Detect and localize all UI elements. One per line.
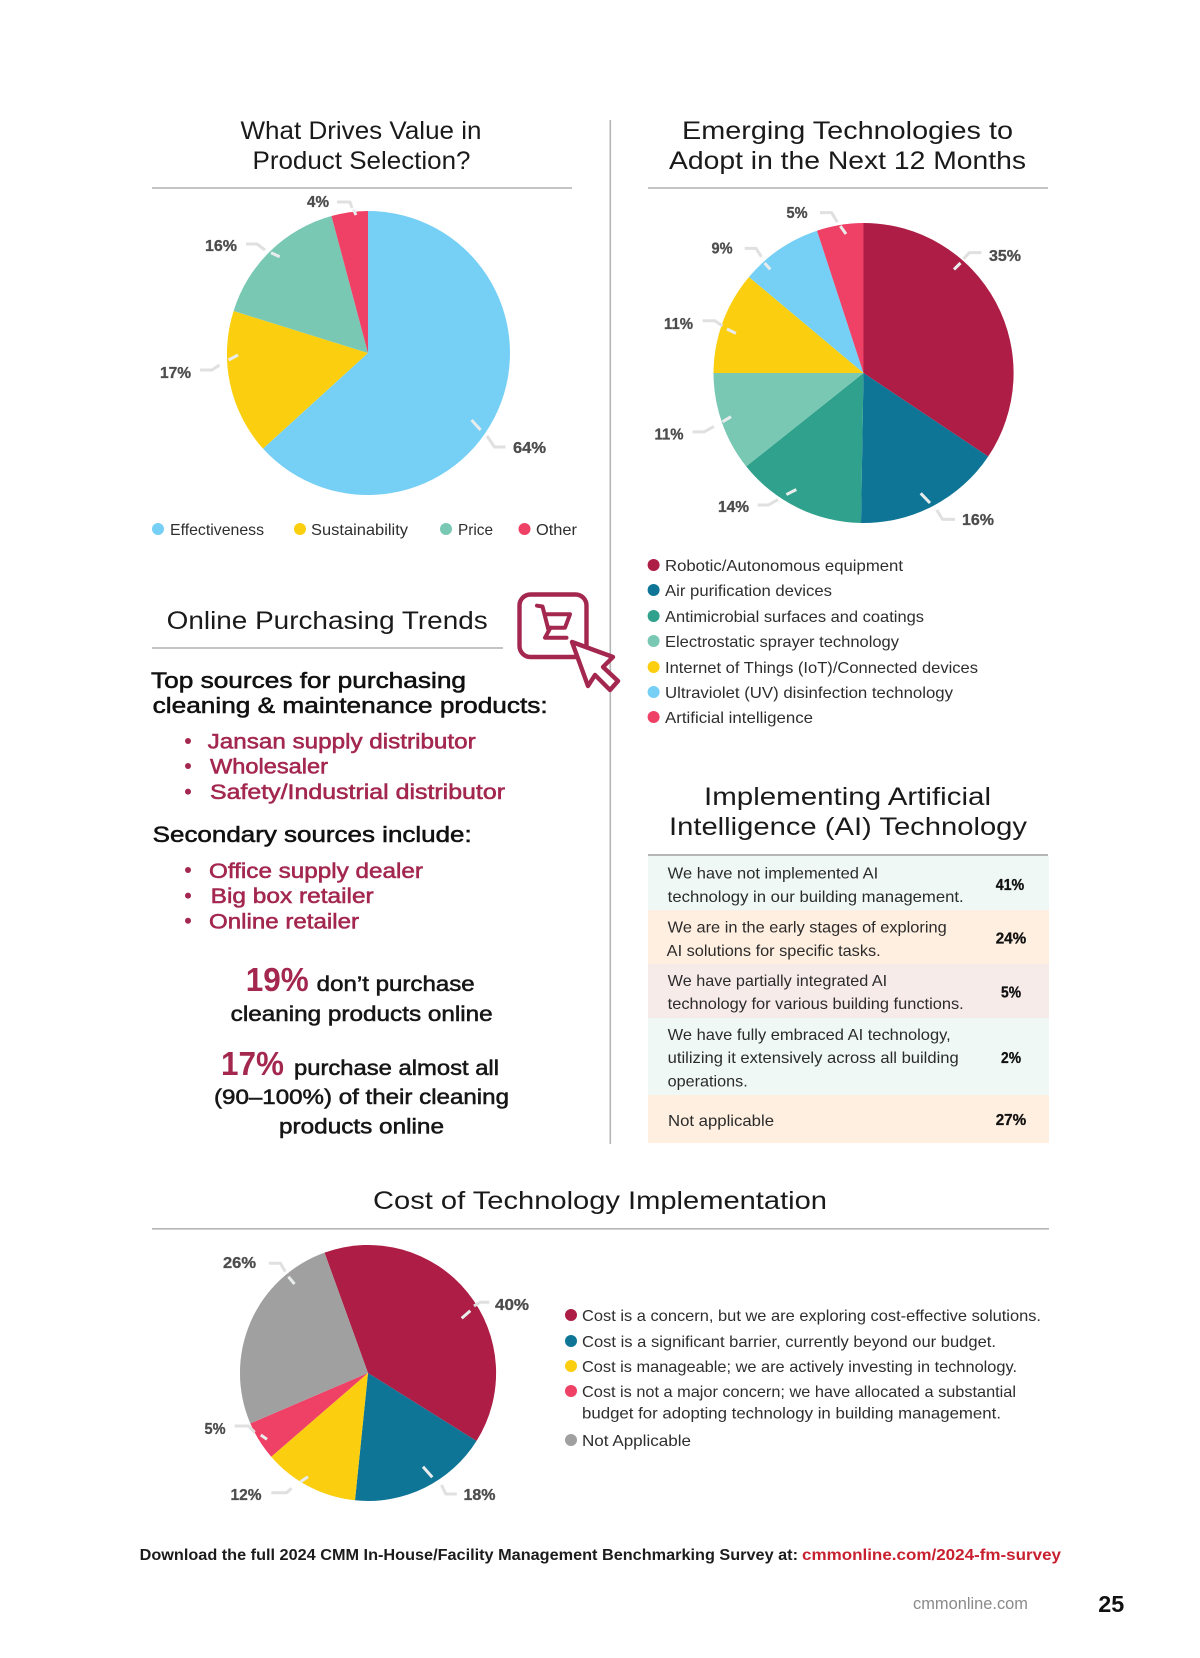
pie chart: emerging technologies: 11% — [654, 426, 684, 444]
legend: emerging technologies: Electrostatic sprayer technology — [665, 634, 899, 651]
table row: early stages: We are in the early stages of exploring — [668, 920, 947, 936]
legend: emerging technologies: Internet of Things (IoT)/Connected devices — [665, 660, 978, 677]
pie chart: emerging technologies — [654, 205, 1021, 529]
panel: cost of technology implementation — [152, 1187, 1049, 1504]
table row: not implemented: 41% — [996, 877, 1024, 894]
panel: emerging technologies — [648, 117, 1048, 727]
legend: emerging technologies — [648, 558, 978, 727]
pie chart: emerging technologies: 9% — [712, 240, 732, 258]
table row: not applicable — [648, 1095, 1049, 1143]
table row: fully embraced: We have fully embraced AI technology, — [668, 1027, 951, 1044]
callout: 19 percent: 19% — [246, 961, 309, 998]
heading: implementing AI: Implementing Artificial — [704, 783, 991, 811]
text block: secondary sources: Secondary sources include: — [153, 822, 472, 847]
table row: fully embraced: utilizing it extensively across all building — [668, 1050, 959, 1067]
heading: implementing AI: Intelligence (AI) Technology — [669, 813, 1028, 841]
heading: what drives value: What Drives Value in — [240, 117, 482, 145]
footer: website: cmmonline.com — [913, 1595, 1028, 1613]
list: secondary sources: Big box retailer — [211, 885, 374, 908]
legend: emerging technologies: Ultraviolet (UV) disinfection technology — [665, 685, 953, 702]
legend: value drivers: Sustainability — [311, 522, 408, 539]
pie chart: emerging technologies: 16% — [962, 512, 994, 529]
table row: early stages: 24% — [996, 930, 1026, 948]
pie chart: cost of technology: 26% — [223, 1255, 256, 1272]
callout: 19 percent — [231, 961, 493, 1026]
legend: value drivers: Other — [536, 522, 578, 539]
list: secondary sources — [185, 860, 423, 934]
pie chart: value drivers: 16% — [205, 238, 237, 255]
table row: not implemented: technology in our building management. — [668, 889, 964, 906]
pie chart: cost of technology: 18% — [464, 1487, 496, 1504]
list: secondary sources: Office supply dealer — [209, 860, 423, 883]
legend: cost of technology: Cost is a concern, but we are exploring cost-effective solutions. — [582, 1308, 1041, 1325]
heading: emerging technologies: Emerging Technologies to — [682, 117, 1013, 145]
legend: cost of technology: Not Applicable — [582, 1433, 691, 1450]
pie chart: emerging technologies: 5% — [786, 205, 808, 222]
table row: not implemented: We have not implemented AI — [668, 866, 878, 882]
list: top sources: Wholesaler — [210, 756, 328, 778]
pie chart: cost of technology: 12% — [230, 1487, 262, 1504]
pie chart: value drivers: 4% — [307, 194, 329, 211]
legend: value drivers: Price — [458, 522, 493, 539]
table row: partially integrated: 5% — [1001, 984, 1021, 1002]
pie chart: value drivers: 17% — [160, 365, 191, 382]
legend: emerging technologies: Artificial intelligence — [665, 710, 813, 727]
callout: 19 percent: cleaning products online — [231, 1003, 493, 1026]
callout: 17 percent: (90–100%) of their cleaning — [214, 1086, 509, 1109]
heading: what drives value: Product Selection? — [252, 147, 470, 175]
footer: download note: cmmonline.com/2024-fm-survey — [802, 1547, 1061, 1564]
legend: emerging technologies: Air purification devices — [665, 583, 832, 600]
heading: emerging technologies: Adopt in the Next 12 Months — [669, 147, 1026, 175]
table row: partially integrated — [648, 964, 1049, 1018]
table row: fully embraced: 2% — [1001, 1050, 1021, 1067]
legend: emerging technologies: Robotic/Autonomous equipment — [665, 558, 904, 575]
table row: partially integrated: We have partially integrated AI — [668, 973, 887, 990]
pie chart: cost of technology — [204, 1245, 529, 1504]
list: secondary sources: Online retailer — [209, 910, 359, 934]
heading: online purchasing trends: Online Purchasing Trends — [167, 607, 488, 635]
table row: not applicable: 27% — [996, 1112, 1026, 1129]
table row: early stages — [648, 910, 1049, 964]
pie chart: value drivers: 64% — [513, 440, 546, 457]
table row: fully embraced — [648, 1018, 1049, 1095]
callout: 17 percent: purchase almost all — [294, 1057, 499, 1080]
table row: early stages: AI solutions for specific tasks. — [667, 943, 881, 960]
footer: download note: Download the full 2024 CMM In-House/Facility Management Benchmarking Survey at: — [140, 1547, 798, 1564]
table row: fully embraced: operations. — [668, 1074, 748, 1091]
callout: 17 percent: products online — [279, 1116, 444, 1138]
pie chart: emerging technologies: 35% — [989, 248, 1021, 265]
legend: emerging technologies: Antimicrobial surfaces and coatings — [665, 609, 924, 626]
text block: top sources: cleaning & maintenance products: — [153, 693, 548, 718]
legend: value drivers: Effectiveness — [170, 522, 264, 539]
panel: online purchasing trends — [151, 594, 618, 1138]
list: top sources — [185, 731, 505, 804]
pie chart: cost of technology: 40% — [495, 1297, 529, 1314]
legend: cost of technology: Cost is manageable; we are actively investing in technology. — [582, 1359, 1017, 1376]
legend: cost of technology — [565, 1308, 1041, 1450]
heading: cost of technology: Cost of Technology Implementation — [373, 1187, 827, 1215]
callout: 17 percent: 17% — [221, 1045, 284, 1082]
pie chart: cost of technology: 5% — [204, 1421, 226, 1438]
table row: not applicable: Not applicable — [668, 1113, 774, 1130]
heading: what drives value — [152, 117, 572, 189]
list: top sources: Jansan supply distributor — [208, 731, 476, 754]
pie chart: emerging technologies: 14% — [718, 499, 749, 516]
footer: page number: 25 — [1098, 1591, 1125, 1617]
panel: implementing AI technology — [648, 783, 1049, 1143]
legend: cost of technology: Cost is a significant barrier, currently beyond our budget. — [582, 1334, 996, 1351]
pie chart: emerging technologies: 11% — [664, 316, 693, 333]
table row: not implemented — [648, 856, 1049, 910]
callout: 19 percent: don’t purchase — [317, 973, 475, 996]
pie chart: value drivers — [160, 194, 546, 495]
table row: partially integrated: technology for various building functions. — [668, 996, 964, 1013]
callout: 17 percent — [214, 1045, 509, 1138]
legend: cost of technology: Cost is not a major concern; we have allocated a substantial — [582, 1384, 1016, 1401]
text block: top sources — [151, 668, 548, 718]
heading: emerging technologies — [648, 117, 1048, 189]
legend: cost of technology: budget for adopting technology in building management. — [582, 1406, 1001, 1422]
list: top sources: Safety/Industrial distributor — [210, 781, 505, 804]
panel: what drives value in product selection — [152, 117, 578, 539]
heading: implementing AI — [648, 783, 1048, 856]
footer: download note — [140, 1547, 1061, 1564]
icon: shopping cart with cursor — [520, 594, 618, 690]
legend: value drivers — [152, 522, 578, 539]
text block: top sources: Top sources for purchasing — [151, 668, 466, 693]
